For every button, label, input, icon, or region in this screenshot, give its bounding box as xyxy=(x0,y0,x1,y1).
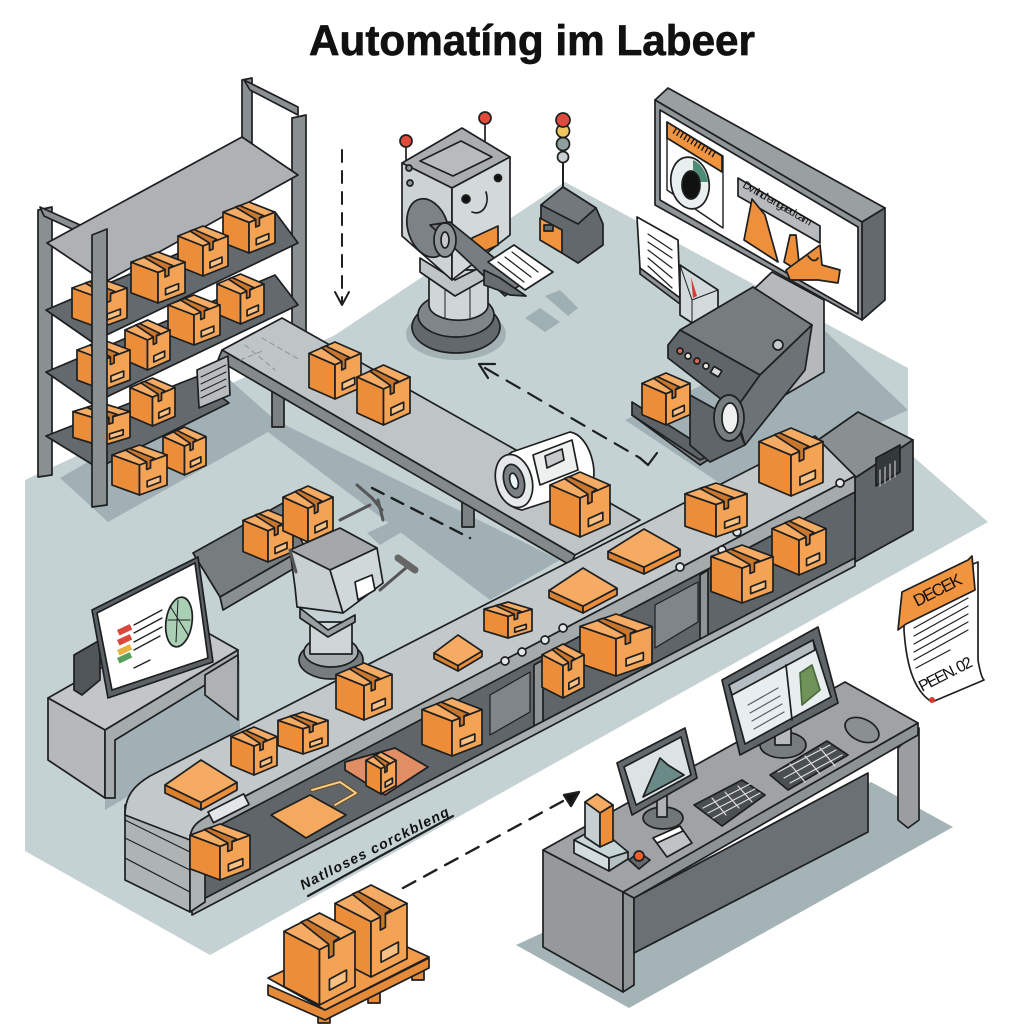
boxes on belt xyxy=(165,428,823,810)
side dial xyxy=(773,340,783,350)
document text lines xyxy=(914,598,968,668)
small monitor xyxy=(617,728,697,829)
box beside roll xyxy=(550,472,610,537)
pick tool xyxy=(340,485,383,520)
label printer machine xyxy=(632,272,824,465)
monitor chart circle xyxy=(163,595,195,649)
mouse xyxy=(841,712,883,748)
small conveyor xyxy=(193,503,305,597)
robot head xyxy=(402,128,510,280)
pallet feet xyxy=(318,962,424,1023)
rail buttons xyxy=(208,479,844,823)
floor: main factory floor xyxy=(25,182,988,955)
dashed arrow: from printer to robot xyxy=(479,364,657,465)
row 4 boxes xyxy=(112,427,206,495)
faint belt markings xyxy=(240,338,300,370)
boxes inside cavity xyxy=(190,517,826,880)
monitor text lines xyxy=(134,610,162,668)
red button xyxy=(629,851,650,869)
shelf level 4 xyxy=(46,377,229,468)
indicator buttons xyxy=(677,348,722,377)
floor: desk area xyxy=(516,782,953,1008)
monitor xyxy=(92,557,213,698)
robot base xyxy=(412,270,500,353)
row 3 boxes xyxy=(73,378,175,446)
workflow label: Natlloses corckbleng xyxy=(297,803,452,893)
pin xyxy=(929,697,935,703)
small floor marker xyxy=(525,290,578,332)
printer hood xyxy=(680,287,812,375)
conveyor legs xyxy=(272,385,474,527)
screen orange icons xyxy=(744,199,840,283)
conveyor belt xyxy=(125,436,855,840)
top shelf xyxy=(47,137,298,282)
shelf level 2 xyxy=(46,212,298,342)
row 2 boxes xyxy=(77,274,264,390)
monitor color bars xyxy=(117,624,132,663)
box in printer xyxy=(642,373,690,425)
control box xyxy=(541,187,603,263)
boxes xyxy=(335,885,407,977)
open box xyxy=(345,748,428,795)
dashed arrow: down to conveyor xyxy=(335,150,349,305)
end stack xyxy=(125,805,215,912)
keyboard large xyxy=(770,741,848,790)
signal lights xyxy=(556,113,570,162)
antennas xyxy=(400,112,491,170)
rack back posts xyxy=(38,78,306,477)
left monitor station xyxy=(48,557,238,798)
secondary robot station xyxy=(193,485,415,679)
pallet with boxes xyxy=(268,885,429,1023)
printer roller xyxy=(690,395,745,462)
screen orange heading: IIIIIIIIIIII xyxy=(671,126,717,159)
conveyor cavity xyxy=(192,490,855,912)
screen caption: Dv rlnd' erngaed cam xyxy=(740,179,814,229)
machine vent under rack xyxy=(197,356,230,408)
rack front post xyxy=(92,229,107,507)
robot base xyxy=(299,608,363,679)
conveyor tower xyxy=(818,412,913,562)
robot collar xyxy=(420,255,505,296)
screen orange heading xyxy=(667,122,722,172)
conveyor front rail xyxy=(190,476,855,855)
thermal label roll unit xyxy=(490,432,594,512)
tower stack xyxy=(574,794,628,871)
pinned document xyxy=(898,556,984,703)
keyboard small xyxy=(694,780,765,826)
flat cardboard xyxy=(271,795,346,838)
dashed arrow: pallet to desk xyxy=(403,792,579,888)
shelving rack with boxes xyxy=(38,78,306,507)
bracket piece xyxy=(312,782,356,805)
open envelope xyxy=(680,265,718,340)
robot arm xyxy=(400,193,524,296)
pallet xyxy=(268,930,429,1020)
main conveyor line xyxy=(125,412,913,915)
small conveyor boxes xyxy=(243,486,333,562)
document header band: DECEK xyxy=(910,570,966,611)
conveyor belt xyxy=(222,318,640,555)
large wall display xyxy=(655,88,885,320)
operator desk xyxy=(543,627,919,992)
gripper xyxy=(484,270,526,296)
boxes on upper conveyor xyxy=(309,342,410,425)
large monitor xyxy=(722,627,838,758)
table xyxy=(48,620,238,798)
robot face xyxy=(462,174,502,213)
note pad xyxy=(653,826,692,857)
monitor stand xyxy=(74,640,100,695)
held label sheet xyxy=(488,245,553,290)
screen panel divider xyxy=(667,122,723,228)
document footer: PEEN. 02 xyxy=(916,654,976,696)
robot torso panel xyxy=(472,226,498,257)
base plate xyxy=(632,405,708,465)
robot head xyxy=(290,528,415,613)
roll control panel xyxy=(533,440,578,485)
signal tower and control box xyxy=(540,113,603,263)
back unit xyxy=(753,272,824,395)
floor shadow xyxy=(406,308,506,360)
main robot arm xyxy=(400,112,578,360)
cavity back panels xyxy=(490,582,698,735)
dashed arrow: middle xyxy=(372,488,470,538)
row 1 boxes xyxy=(72,202,275,328)
desk body xyxy=(543,682,919,992)
conveyor base rail xyxy=(192,558,855,915)
title: Automatíng im Labeer xyxy=(309,17,755,65)
gauge xyxy=(667,154,713,212)
cavity dividers xyxy=(534,570,708,730)
checklist clipboard xyxy=(637,217,680,304)
shelf level 3 xyxy=(46,275,298,404)
floor: shadows xyxy=(60,330,908,810)
screen caption xyxy=(738,178,820,243)
upper conveyor xyxy=(218,318,640,565)
document header band xyxy=(898,556,975,630)
